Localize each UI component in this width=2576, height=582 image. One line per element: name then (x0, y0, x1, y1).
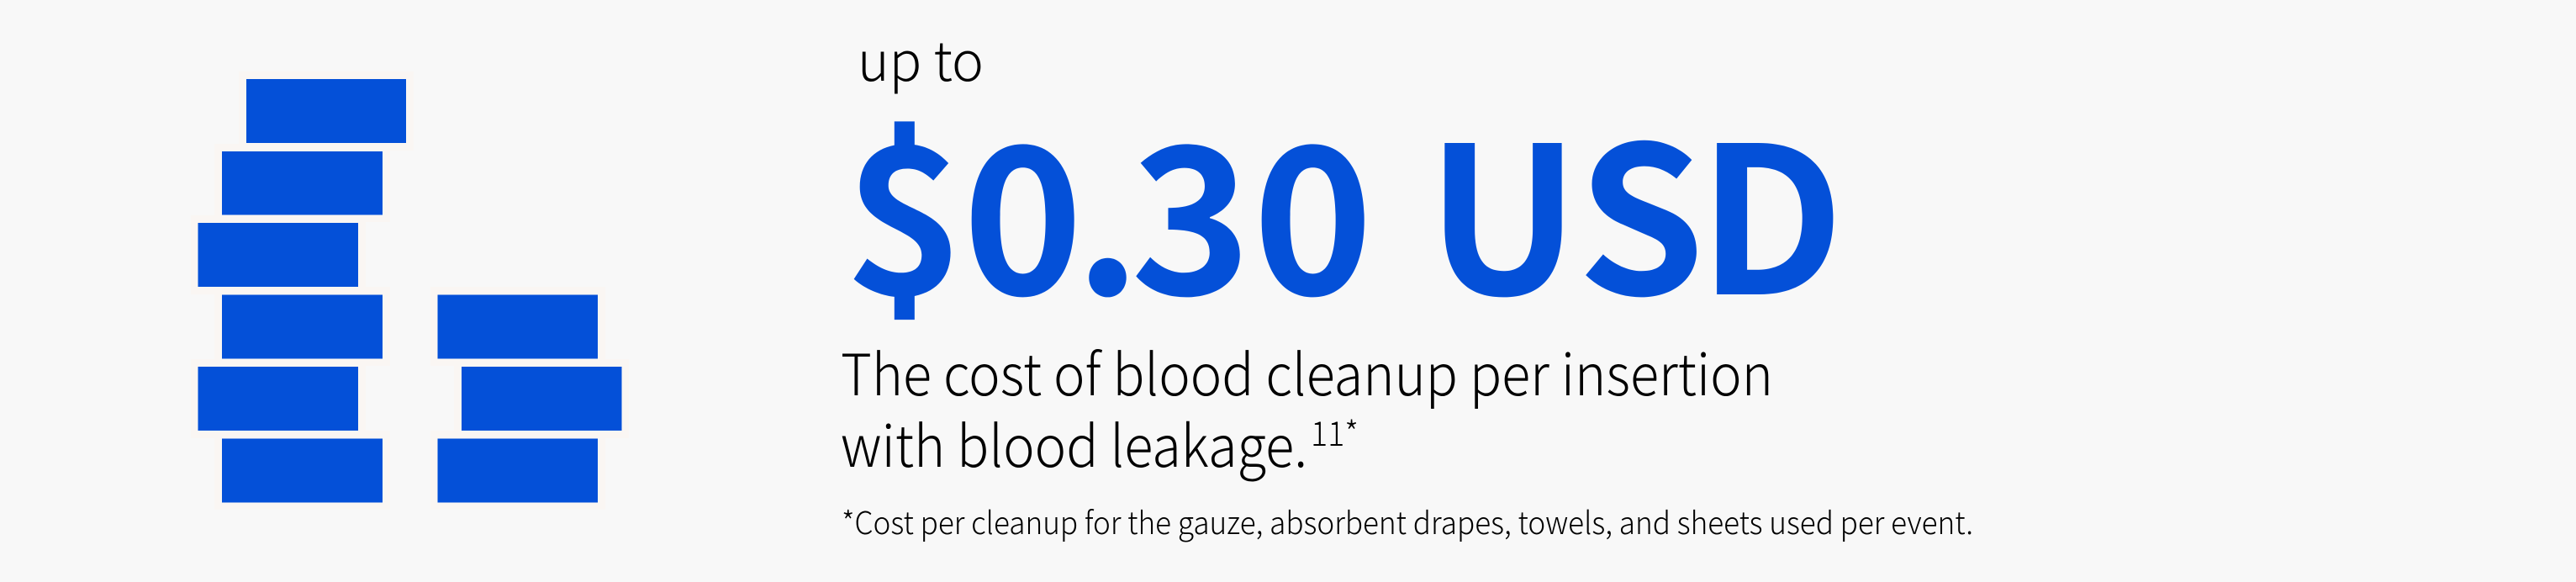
footnote: *Cost per cleanup for the gauze, absorbent drapes, towels, and sheets used per event. (842, 498, 1973, 543)
icon: stacks of coins (191, 71, 629, 510)
heading: price: $0.30 USD (844, 57, 1845, 353)
text: description: The cost of blood cleanup per insertion (841, 329, 1773, 412)
text: description: 11* (1311, 407, 1359, 456)
text: description (841, 329, 1773, 484)
text: description: with blood leakage. (841, 400, 1307, 484)
text: up to: up to (858, 18, 984, 97)
